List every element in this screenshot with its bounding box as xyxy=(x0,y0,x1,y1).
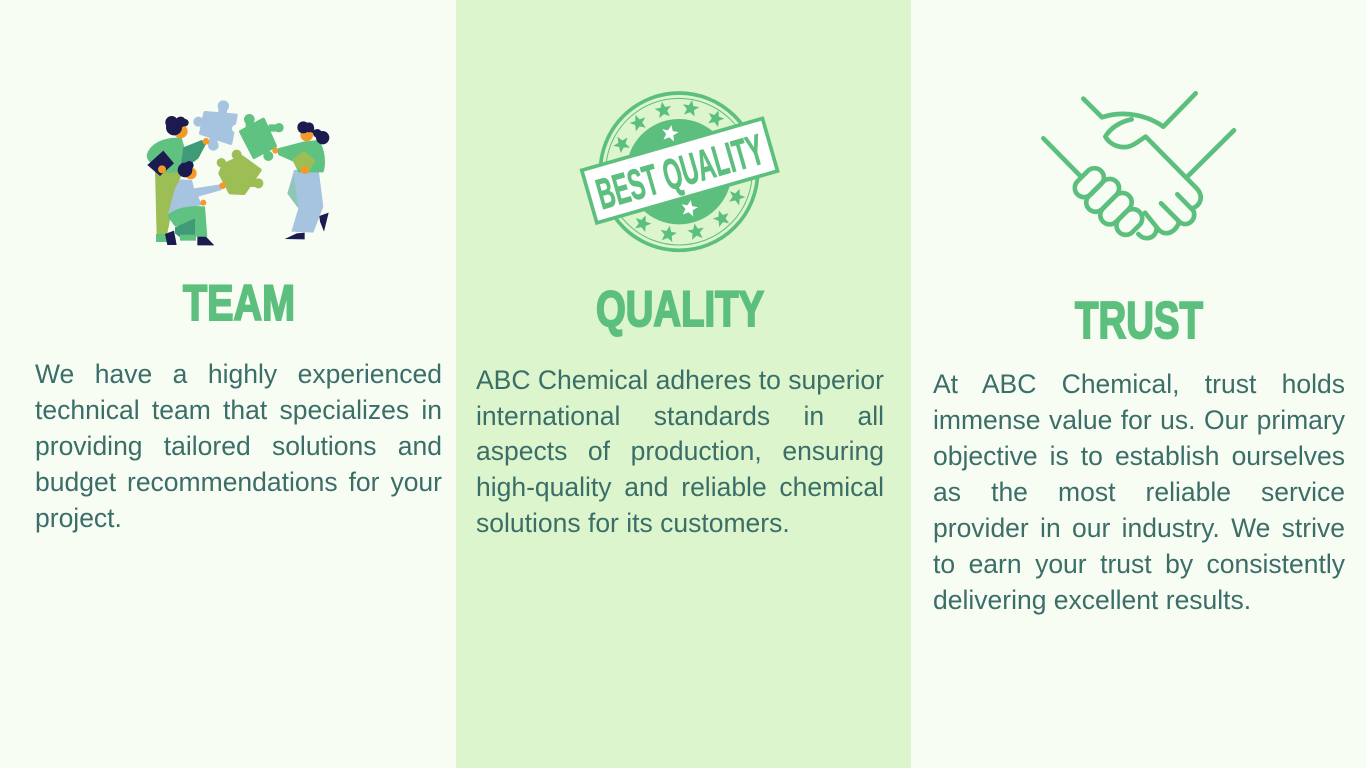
text block: trust description: immense value for us. Our primary xyxy=(933,405,1345,435)
icon: best quality stamp: BEST QUALITY xyxy=(591,126,769,219)
icon: handshake xyxy=(1041,91,1236,240)
text block: team description xyxy=(35,359,442,533)
text block: quality description: high-quality and reliable chemical xyxy=(476,472,884,502)
text block: trust description: delivering excellent results. xyxy=(933,585,1251,615)
text block: quality description: aspects of production, ensuring xyxy=(476,436,884,466)
panel: team xyxy=(0,0,456,768)
text block: trust description xyxy=(933,369,1345,615)
icon: team assembling puzzle pieces xyxy=(146,100,330,246)
text block: team description: providing tailored solutions and xyxy=(35,431,442,461)
text block: trust description: At ABC Chemical, trust holds xyxy=(933,369,1345,399)
text block: team description: We have a highly experienced xyxy=(35,359,442,389)
text block: team description: technical team that specializes in xyxy=(35,395,442,425)
heading: team: TEAM xyxy=(183,275,295,331)
panel: trust xyxy=(911,0,1366,768)
panel: quality xyxy=(456,0,911,768)
text block: trust description: to earn your trust by consistently xyxy=(933,549,1345,579)
text block: quality description: ABC Chemical adheres to superior xyxy=(476,365,884,395)
icon: best quality stamp xyxy=(580,91,780,252)
text block: team description: project. xyxy=(35,503,122,533)
text block: team description: budget recommendations for your xyxy=(35,467,442,497)
text block: quality description: international standards in all xyxy=(476,401,884,431)
text block: quality description xyxy=(476,365,884,538)
text block: trust description: provider in our industry. We strive xyxy=(933,513,1345,543)
text block: trust description: objective is to establish ourselves xyxy=(933,441,1345,471)
heading: trust: TRUST xyxy=(1075,292,1203,350)
heading: quality: QUALITY xyxy=(596,281,764,337)
text block: trust description: as the most reliable service xyxy=(933,477,1345,507)
text block: quality description: solutions for its customers. xyxy=(476,508,790,538)
